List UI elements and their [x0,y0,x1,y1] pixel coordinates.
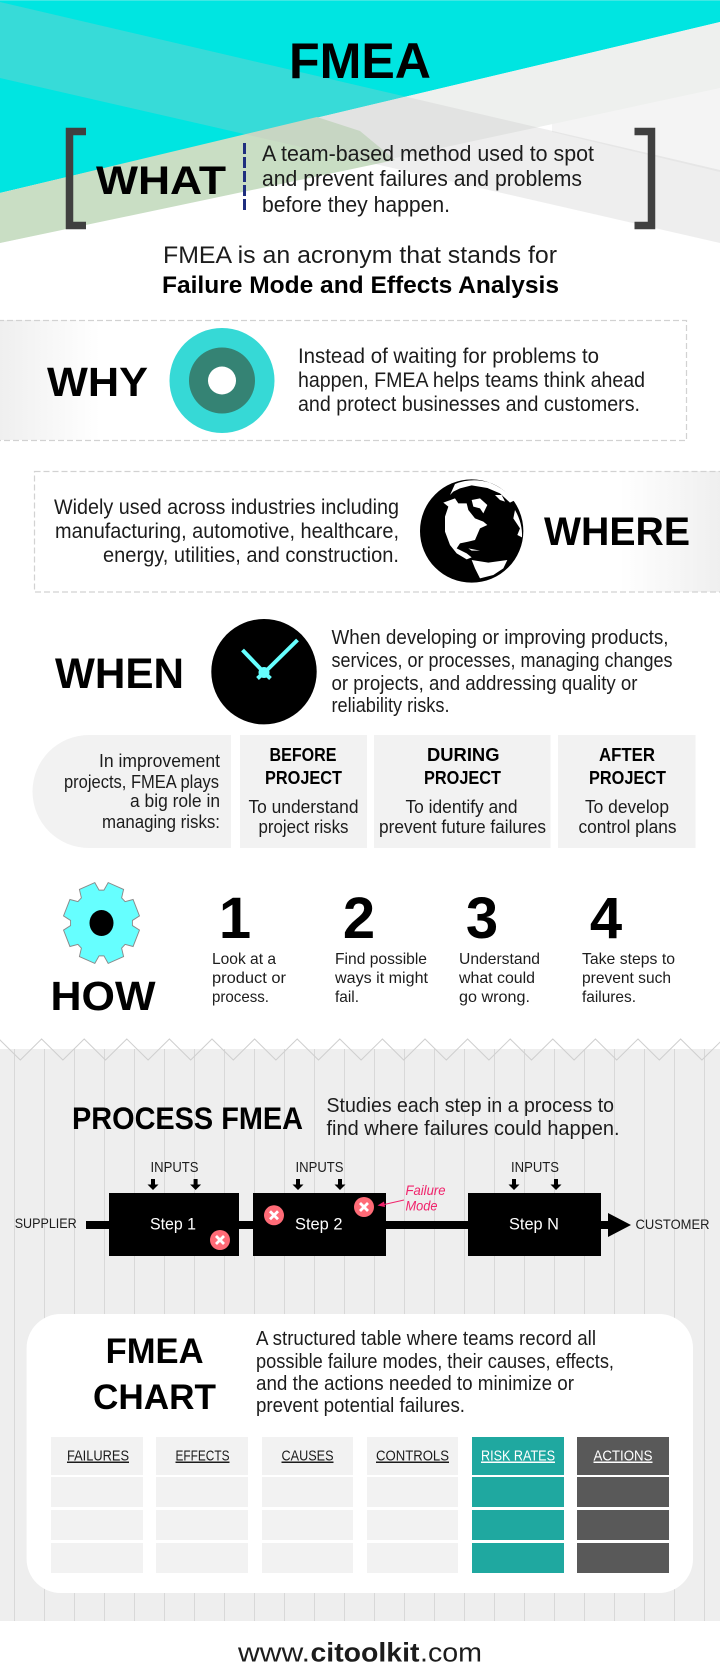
chart description [256,1328,614,1417]
step 2: ways it might [334,970,429,987]
chart description: possible failure modes, their causes, effects, [256,1351,614,1373]
failure marker: step 2 right [354,1197,374,1217]
why description [298,344,645,416]
step 2 box: Step 2 [295,1214,342,1234]
when description: reliability risks. [332,694,450,717]
table column: failures: FAILURES [67,1448,129,1464]
step 4: prevent such [582,970,671,987]
where description: Widely used across industries including [54,495,399,519]
acronym statement: Failure Mode and Effects Analysis [162,272,559,299]
step 1 box: Step 1 [150,1214,196,1234]
heading: fmea chart: FMEA [106,1332,204,1371]
failure marker: step 1 [210,1230,230,1250]
customer label: CUSTOMER [636,1216,710,1232]
panel: after project: AFTER [599,745,655,765]
table column: actions: ACTIONS [594,1448,652,1464]
step 1: Look at a [212,951,276,968]
inputs labels: INPUTS [511,1159,559,1176]
step 2: 2 [343,886,375,951]
heading: fmea chart [93,1332,216,1417]
panel: during project: PROJECT [424,768,501,788]
table column: risk rates: RISK RATES [481,1448,555,1464]
when description: or projects, and addressing quality or [332,672,638,695]
failure mode label [406,1182,446,1214]
icon: gear [64,883,139,963]
step 3 [458,886,540,1006]
failure marker: step 2 left [264,1205,284,1225]
table column: causes: CAUSES [282,1448,334,1464]
table column: causes [262,1437,353,1573]
process fmea description: Studies each step in a process to [326,1094,614,1117]
lower section background: ruled sheet with zigzag edge [0,1039,720,1621]
icon: clock [211,619,317,724]
inputs labels: INPUTS [296,1159,344,1176]
heading: process fmea: PROCESS FMEA [72,1100,303,1136]
panel: before project: BEFORE [270,745,336,765]
panel: after project: PROJECT [589,768,666,788]
panel: before project [240,735,367,848]
step 1: 1 [219,886,251,951]
panel: before project: project risks [258,817,348,837]
heading: why: WHY [47,359,148,405]
process flow diagram [15,1159,709,1256]
title: FMEA [289,33,431,89]
dashed divider [243,143,246,213]
panel: after project [558,735,696,848]
step 4: Take steps to [582,951,675,968]
header background: angled colour bands [0,0,720,243]
where description [54,495,399,567]
step 2: Find possible [335,951,427,968]
why description: Instead of waiting for problems to [298,344,599,368]
what description: before they happen. [262,192,450,217]
panel: during project: prevent future failures [379,817,546,837]
failure mode label: Mode [406,1198,438,1214]
panel: where [34,471,720,592]
process fmea description: find where failures could happen. [326,1117,620,1140]
heading: what: WHAT [96,159,226,203]
heading: fmea chart: CHART [93,1378,216,1417]
step 3: what could [458,970,535,987]
step 2 box [253,1193,386,1256]
step 3: Understand [459,951,540,968]
table column: controls: CONTROLS [376,1448,449,1464]
heading: when: WHEN [55,650,184,698]
icon: globe [420,479,523,583]
process fmea description [326,1094,620,1140]
inputs labels [150,1159,559,1176]
inputs labels: INPUTS [150,1159,198,1176]
when description [332,626,672,717]
step 4 [582,886,675,1006]
step 2: fail. [335,989,359,1006]
why description: happen, FMEA helps teams think ahead [298,368,645,392]
panel: fmea chart [27,1314,693,1593]
step 3: go wrong. [459,989,530,1006]
chart description: prevent potential failures. [256,1395,465,1417]
panel: improvement projects intro: a big role in [130,791,220,811]
acronym statement: FMEA is an acronym that stands for [163,242,557,269]
right bracket [634,132,652,226]
acronym statement [162,242,559,299]
step 1 box [109,1193,239,1256]
step 4: 4 [590,886,622,951]
panel: what [70,132,652,226]
step 1: product or [212,970,287,987]
step n box [468,1193,601,1256]
when description: When developing or improving products, [332,626,668,649]
why description: and protect businesses and customers. [298,392,640,416]
table column: effects [156,1437,248,1573]
step 4: failures. [582,989,636,1006]
step 1 [212,886,287,1006]
panel: improvement projects intro [32,735,231,848]
panel: during project [374,735,550,848]
when description: services, or processes, managing changes [332,649,672,672]
footer url: .com [420,1638,482,1668]
step 2 [334,886,429,1006]
step 1: process. [212,989,269,1006]
table column: controls [367,1437,458,1573]
what description: and prevent failures and problems [262,166,582,191]
heading: how: HOW [50,973,156,1019]
chart description: and the actions needed to minimize or [256,1373,574,1395]
table column: actions [577,1437,669,1573]
panel: during project: DURING [427,745,500,765]
panel: after project: control plans [578,817,676,837]
table column: failures [51,1437,143,1573]
left bracket [70,132,86,226]
panel: improvement projects intro: In improvement [99,751,220,771]
supplier label: SUPPLIER [15,1215,77,1231]
flow line with arrowhead [86,1213,631,1237]
panel: improvement projects intro: managing risks: [102,812,220,832]
where description: energy, utilities, and construction. [103,543,399,567]
icon: target [170,328,274,433]
panel: why [0,320,686,440]
table column: effects: EFFECTS [176,1448,230,1464]
chart description: A structured table where teams record all [256,1328,596,1350]
step n box: Step N [509,1214,559,1234]
footer url: www. [237,1638,310,1668]
heading: where: WHERE [544,510,690,554]
panel: during project: To identify and [406,797,518,817]
what description: A team-based method used to spot [262,141,594,166]
where description: manufacturing, automotive, healthcare, [55,519,399,543]
panel: before project: PROJECT [265,768,342,788]
input arrows [148,1179,562,1190]
panel: before project: To understand [248,797,358,817]
failure mode label: Failure [406,1182,446,1198]
panel: after project: To develop [585,797,669,817]
what description [262,141,594,217]
panel: improvement projects intro: projects, FMEA plays [64,772,219,792]
arrow: failure mode pointer [378,1200,404,1207]
table column: risk rates [472,1437,564,1573]
footer url: citoolkit [310,1638,420,1668]
step 3: 3 [466,886,498,951]
